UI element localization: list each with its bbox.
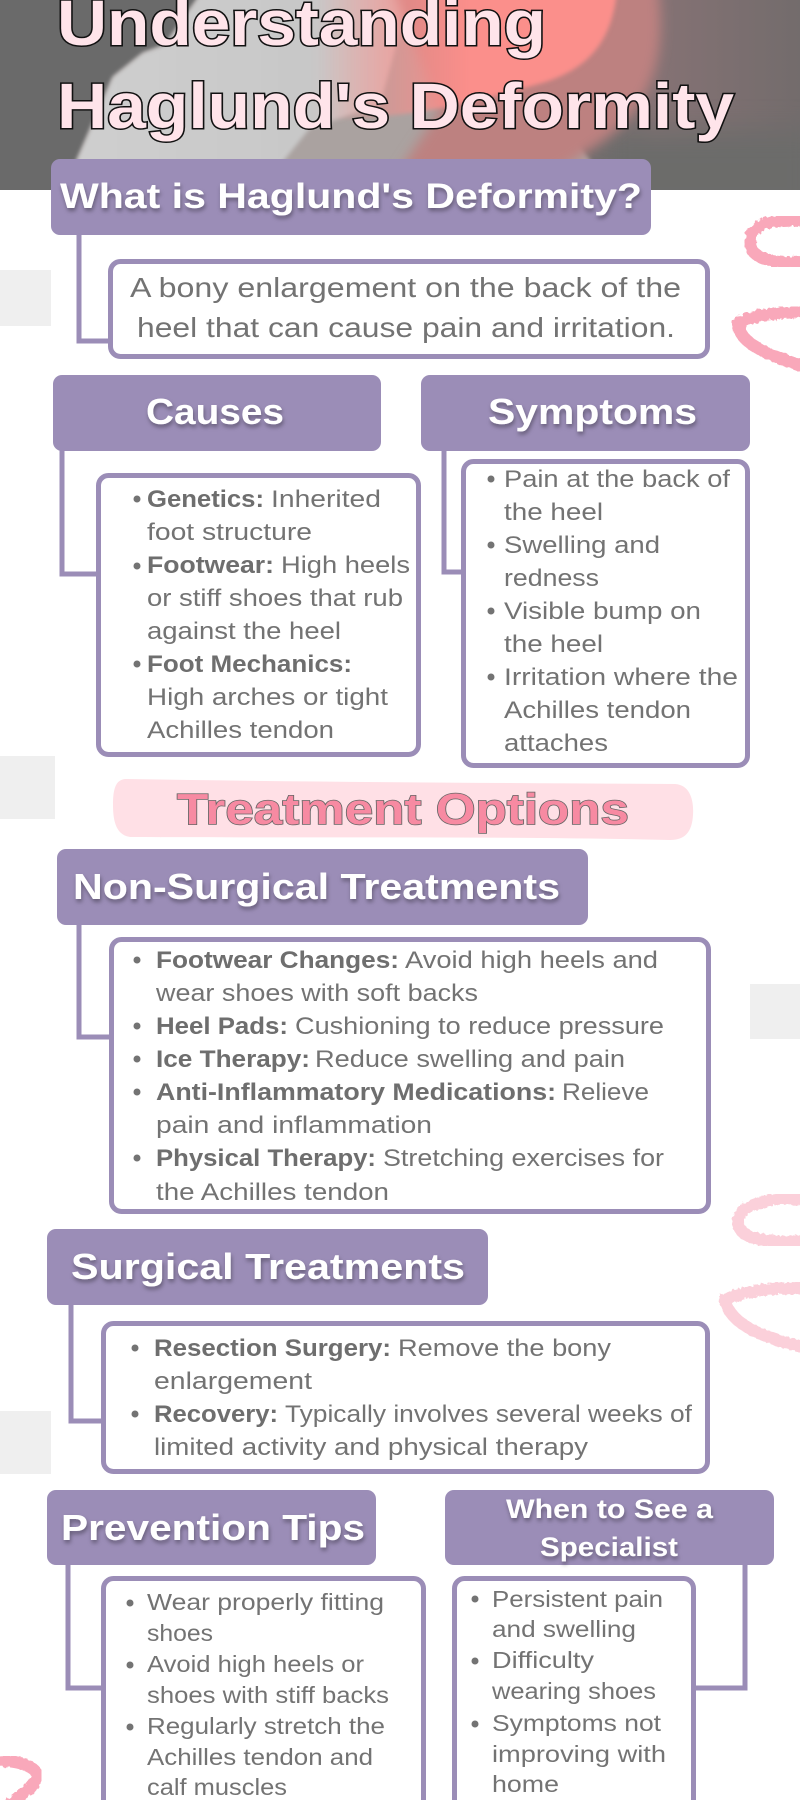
panel: causes: Footwear: bbox=[147, 552, 274, 579]
panel: causes: Achilles tendon bbox=[147, 717, 334, 744]
panel: what is: What is Haglund's Deformity? bbox=[60, 177, 642, 216]
panel: surgical treatments: Resection Surgery: bbox=[154, 1335, 391, 1362]
panel: what is: heel that can cause pain and irritation. bbox=[137, 312, 675, 343]
heading: treatment options: Treatment Options bbox=[177, 785, 629, 834]
panel: what is bbox=[51, 159, 708, 356]
panel: non-surgical treatments: Non-Surgical Treatments bbox=[73, 866, 560, 907]
panel: symptoms: the heel bbox=[504, 499, 603, 526]
panel: non-surgical treatments: Physical Therapy: bbox=[156, 1145, 376, 1172]
panel: causes bbox=[53, 375, 418, 754]
panel: symptoms: Irritation where the bbox=[504, 664, 738, 691]
panel: non-surgical treatments: Cushioning to reduce pressure bbox=[295, 1013, 664, 1040]
panel: symptoms: attaches bbox=[504, 730, 608, 757]
panel: causes: foot structure bbox=[147, 519, 312, 546]
panel: causes: against the heel bbox=[147, 618, 341, 645]
panel: surgical treatments bbox=[47, 1229, 708, 1472]
panel: prevention tips: shoes bbox=[147, 1620, 213, 1646]
panel: symptoms: redness bbox=[504, 565, 599, 592]
panel: surgical treatments: enlargement bbox=[154, 1368, 312, 1395]
panel: causes: Inherited bbox=[271, 486, 381, 513]
panel: surgical treatments: Remove the bony bbox=[398, 1335, 611, 1362]
panel: symptoms: the heel bbox=[504, 631, 603, 658]
panel: when to see a specialist: improving with bbox=[492, 1741, 666, 1767]
panel: when to see a specialist: wearing shoes bbox=[491, 1678, 656, 1704]
panel: causes: Genetics: bbox=[147, 486, 264, 513]
panel: non-surgical treatments: Avoid high heels and bbox=[405, 947, 658, 974]
panel: surgical treatments: Recovery: bbox=[154, 1401, 278, 1428]
panel: causes: High arches or tight bbox=[147, 684, 388, 711]
panel: non-surgical treatments: the Achilles tendon bbox=[156, 1179, 389, 1206]
panel: non-surgical treatments: Stretching exercises for bbox=[383, 1145, 664, 1172]
decorative grey blocks bbox=[0, 270, 800, 1474]
panel: non-surgical treatments: Relieve bbox=[562, 1079, 649, 1106]
panel: when to see a specialist: and swelling bbox=[492, 1616, 636, 1642]
panel: when to see a specialist: Difficulty bbox=[492, 1647, 595, 1673]
panel: symptoms: Achilles tendon bbox=[504, 697, 691, 724]
panel: prevention tips: Avoid high heels or bbox=[147, 1651, 364, 1677]
panel: symptoms: Swelling and bbox=[504, 532, 660, 559]
title: Haglund's Deformity bbox=[57, 70, 734, 142]
panel: what is: A bony enlargement on the back of the bbox=[130, 272, 681, 303]
panel: non-surgical treatments: Footwear Changes: bbox=[156, 947, 399, 974]
panel: causes: Foot Mechanics: bbox=[147, 651, 352, 678]
panel: prevention tips: shoes with stiff backs bbox=[147, 1682, 389, 1708]
panel: symptoms: Pain at the back of bbox=[504, 466, 730, 493]
heading: treatment options bbox=[113, 779, 693, 840]
panel: when to see a specialist: Symptoms not bbox=[492, 1710, 662, 1736]
panel: symptoms bbox=[421, 375, 750, 766]
header photo: x-ray heel bbox=[0, 0, 800, 190]
panel: prevention tips: Achilles tendon and bbox=[147, 1744, 373, 1770]
panel: non-surgical treatments: Anti-Inflammatory Medications: bbox=[156, 1079, 556, 1106]
panel: prevention tips: calf muscles bbox=[147, 1774, 287, 1800]
panel: surgical treatments: limited activity and physical therapy bbox=[154, 1434, 588, 1461]
panel: prevention tips bbox=[47, 1490, 424, 1800]
panel: when to see a specialist: home bbox=[492, 1771, 559, 1797]
panel: prevention tips: Wear properly fitting bbox=[147, 1589, 384, 1615]
panel: when to see a specialist bbox=[445, 1490, 774, 1800]
panel: causes: or stiff shoes that rub bbox=[147, 585, 403, 612]
panel: non-surgical treatments: pain and inflammation bbox=[156, 1112, 432, 1139]
panel: causes: Causes bbox=[146, 391, 284, 432]
panel: non-surgical treatments: Heel Pads: bbox=[156, 1013, 288, 1040]
panel: when to see a specialist: When to See a bbox=[506, 1494, 714, 1524]
panel: when to see a specialist: Persistent pain bbox=[492, 1586, 663, 1612]
panel: when to see a specialist: Specialist bbox=[540, 1532, 678, 1562]
panel: non-surgical treatments: Reduce swelling and pain bbox=[315, 1046, 625, 1073]
panel: symptoms: Visible bump on bbox=[504, 598, 701, 625]
panel: symptoms: Symptoms bbox=[488, 391, 697, 432]
panel: non-surgical treatments bbox=[57, 849, 708, 1212]
panel: prevention tips: Prevention Tips bbox=[61, 1507, 365, 1548]
panel: causes: High heels bbox=[281, 552, 410, 579]
title bbox=[57, 0, 734, 142]
panel: non-surgical treatments: wear shoes with soft backs bbox=[155, 980, 478, 1007]
panel: prevention tips: Regularly stretch the bbox=[147, 1713, 385, 1739]
panel: surgical treatments: Surgical Treatments bbox=[71, 1246, 465, 1287]
panel: surgical treatments: Typically involves several weeks of bbox=[285, 1401, 692, 1428]
panel: non-surgical treatments: Ice Therapy: bbox=[156, 1046, 310, 1073]
